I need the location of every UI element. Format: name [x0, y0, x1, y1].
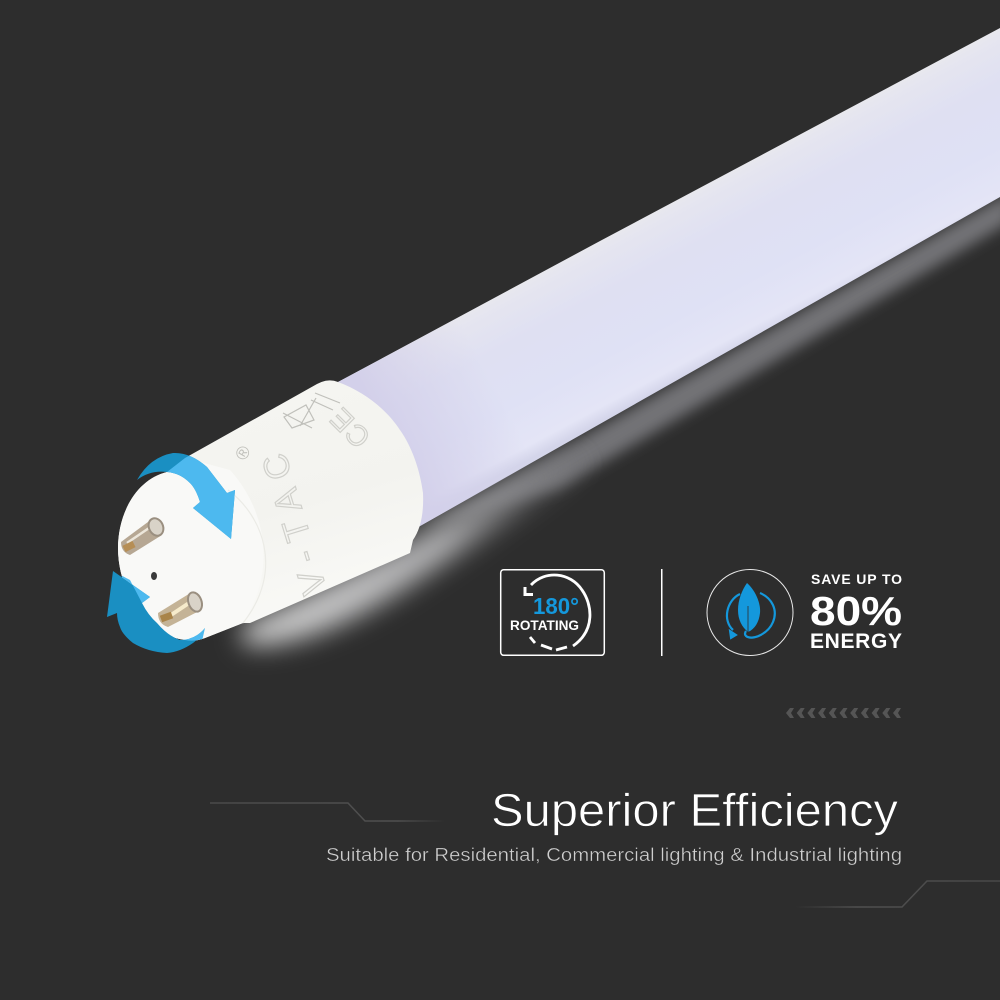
circular arrow	[531, 575, 590, 646]
vertical divider	[661, 569, 662, 656]
pin hole	[151, 572, 157, 580]
save up to: SAVE UP TO	[811, 571, 902, 587]
80 percent: 80%	[810, 588, 902, 634]
energy saving text	[810, 571, 902, 653]
pin: lower	[158, 590, 205, 627]
decorative chevrons	[786, 708, 901, 718]
LED tube product	[118, 28, 1000, 641]
icon: 180 degree rotating badge	[501, 570, 604, 655]
registered mark: ®	[231, 442, 255, 464]
pin: upper	[121, 516, 166, 555]
cap body	[118, 380, 423, 641]
rotation arrow: bottom	[107, 571, 205, 653]
energy: ENERGY	[810, 630, 902, 653]
arrowhead	[525, 587, 533, 594]
tube glow reflection	[240, 192, 1000, 645]
tube body	[338, 28, 1000, 530]
circuit line: left	[210, 803, 445, 821]
180 label: 180°	[533, 593, 579, 619]
bin symbol	[283, 393, 340, 428]
embossed brand text: V-TAC	[255, 449, 335, 599]
neck shading	[118, 458, 264, 641]
leaf	[738, 583, 760, 632]
rotating label: ROTATING	[510, 618, 579, 633]
CE mark: CE	[325, 401, 377, 454]
rotation arrow: top	[137, 453, 235, 539]
title: Superior Efficiency	[491, 784, 898, 836]
cord	[727, 594, 740, 630]
end cap	[118, 380, 423, 641]
subtitle: Suitable for Residential, Commercial lighting & Industrial lighting	[326, 845, 902, 865]
badge frame	[501, 570, 604, 655]
icon: leaf and plug in circle	[707, 570, 793, 656]
circuit line: right	[795, 881, 1000, 907]
